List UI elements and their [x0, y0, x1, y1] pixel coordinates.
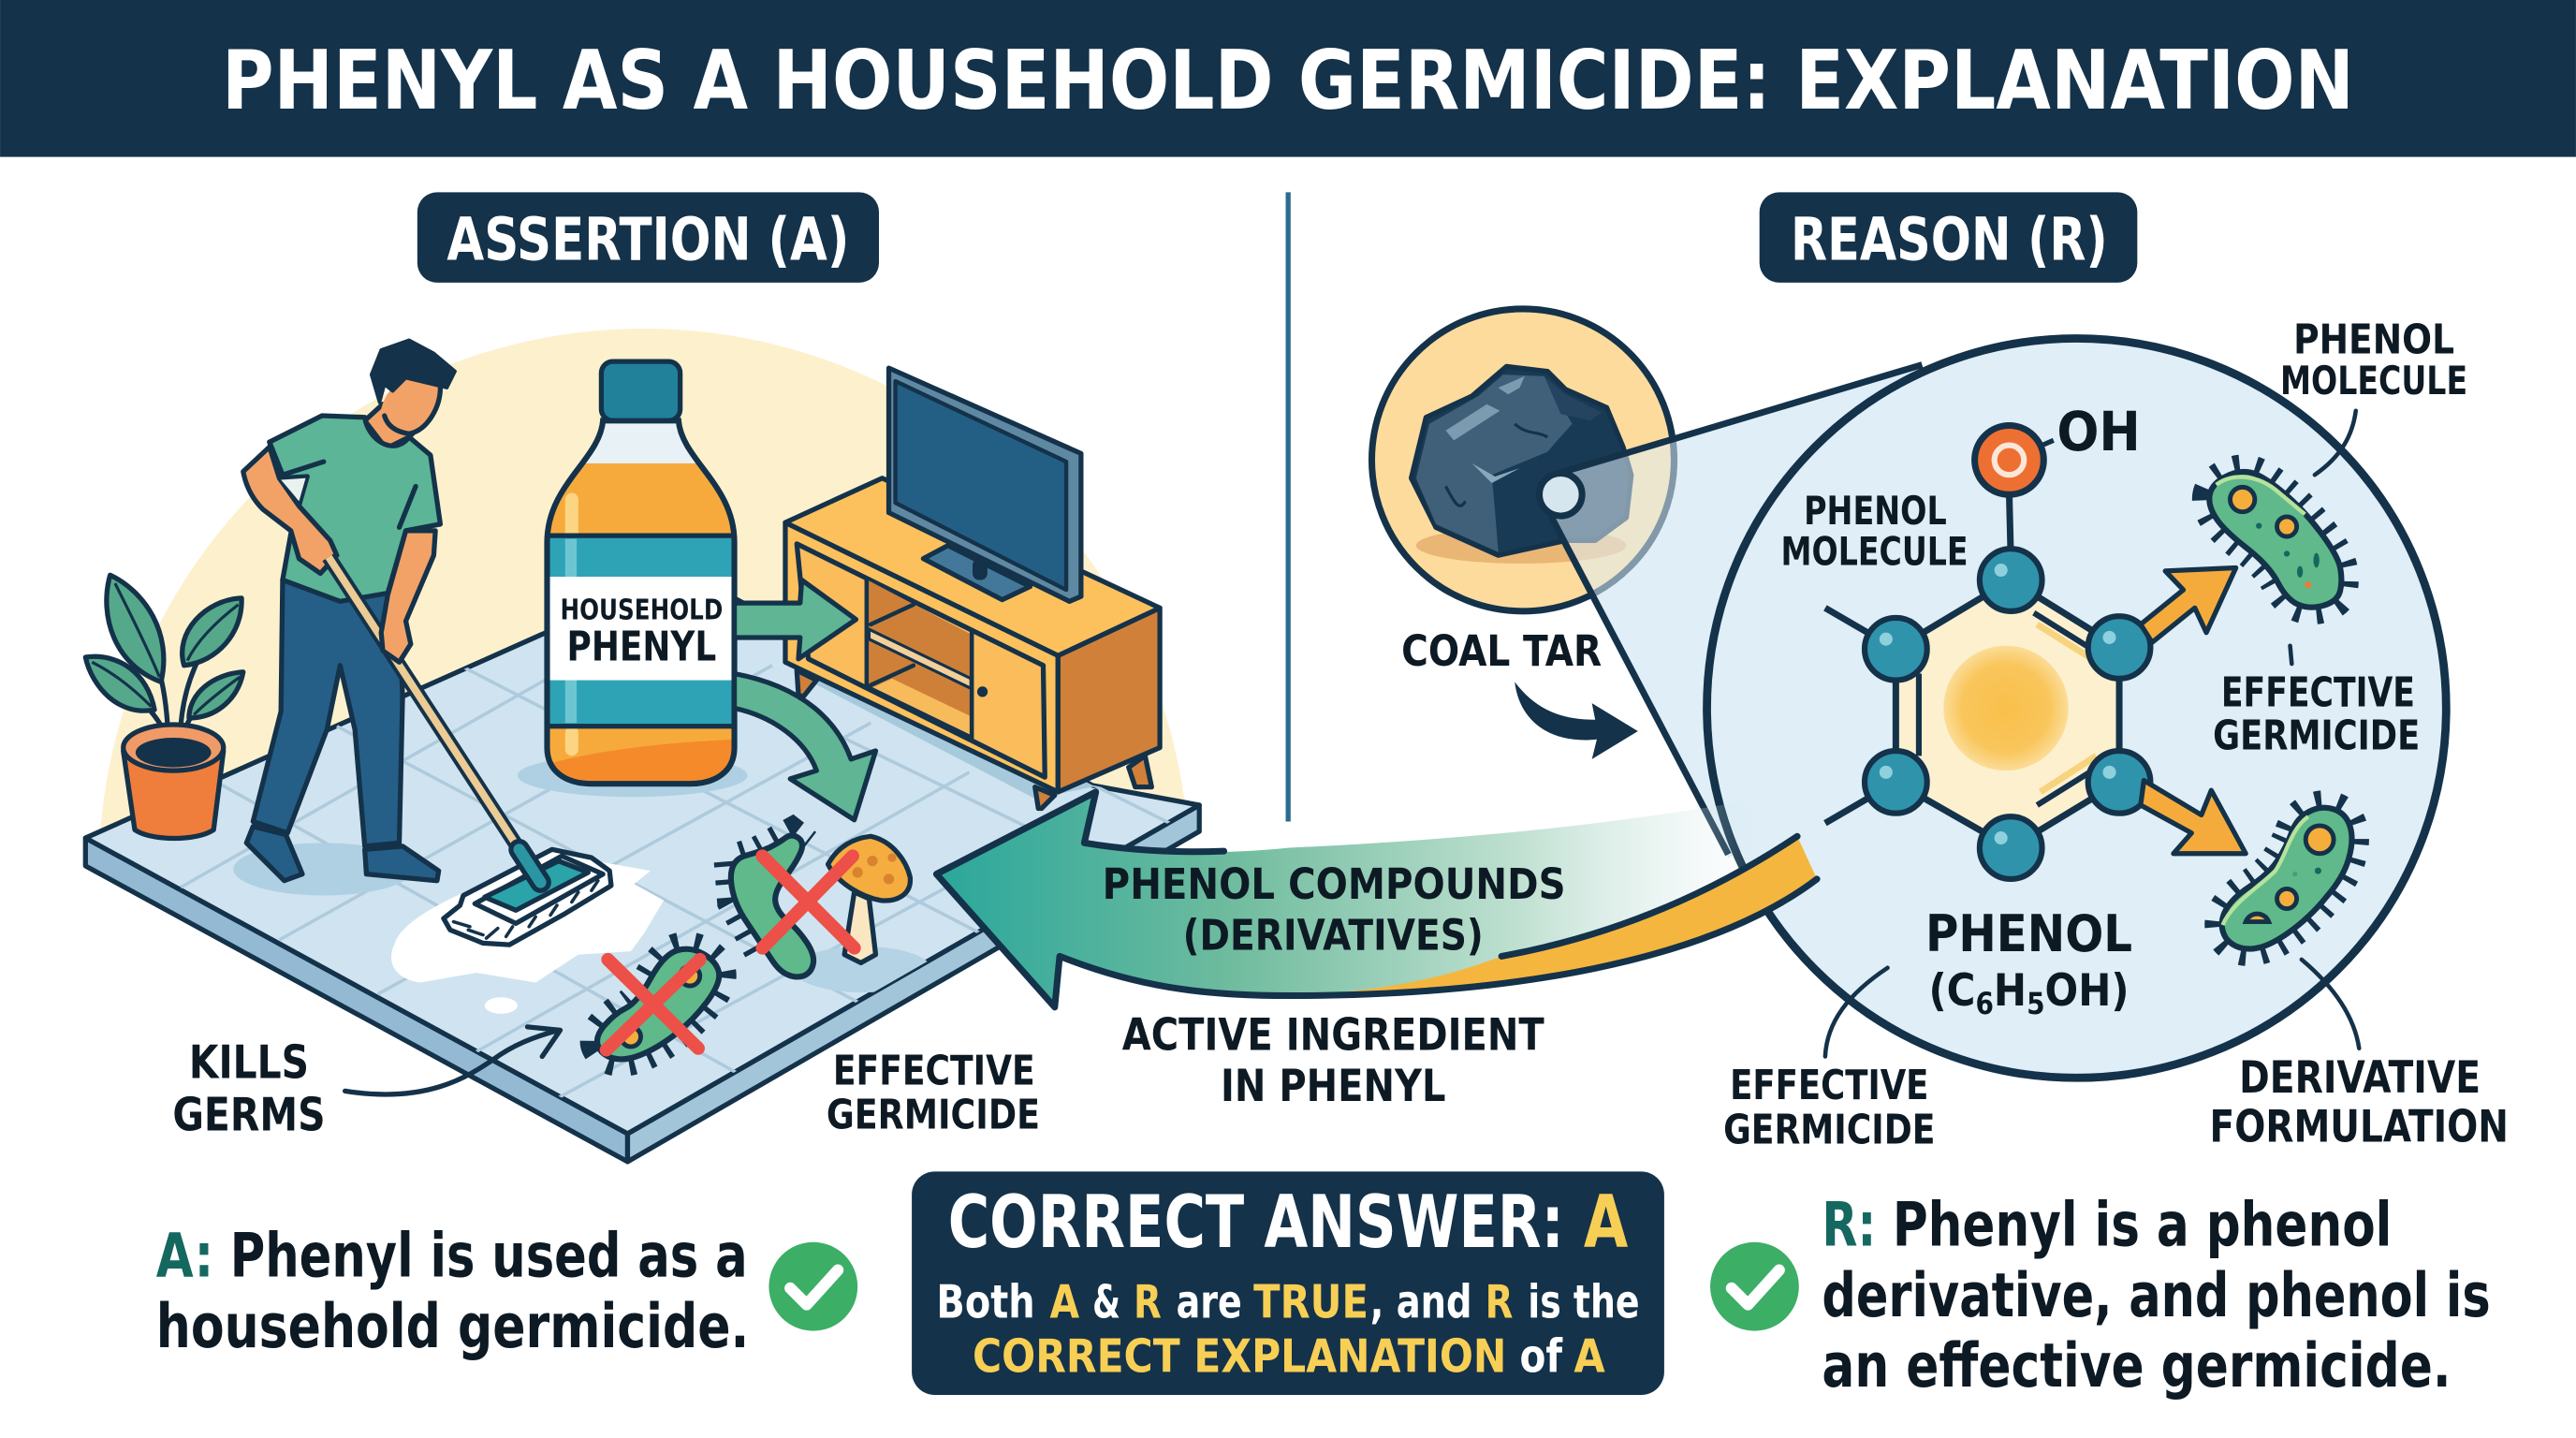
magnifier beam — [1551, 365, 2136, 858]
callout: correct answer: Both — [936, 1275, 1035, 1329]
icon: man mopping — [243, 340, 520, 881]
label: effective germicide right: GERMICIDE — [2213, 712, 2420, 759]
statement: assertion: A: — [156, 1222, 213, 1292]
icon: check reason — [1710, 1242, 1799, 1331]
label: coal tar — [1401, 626, 1638, 759]
heading: assertion — [417, 192, 879, 283]
phenol molecule diagram: OH — [2056, 400, 2141, 463]
phenol molecule diagram: MOLECULE — [1781, 529, 1969, 575]
callout: correct answer: of — [1519, 1328, 1563, 1383]
callout: correct answer: & — [1092, 1275, 1120, 1329]
germ: crossed bacterium and mushroom — [729, 833, 910, 976]
label: derivative formulation: FORMULATION — [2210, 1102, 2509, 1153]
callout: correct answer: R — [1134, 1275, 1162, 1329]
callout: correct answer: R — [1486, 1275, 1513, 1329]
callout: correct answer: are — [1177, 1275, 1242, 1329]
statement: assertion: household germicide. — [156, 1292, 749, 1362]
arrow: molecule to upper bacterium — [2141, 568, 2236, 642]
label: effective germicide — [827, 1047, 1040, 1139]
callout: correct answer: A — [1573, 1328, 1605, 1383]
statement: reason: Phenyl is a phenol — [1893, 1190, 2392, 1260]
icon: coal tar in circle — [1372, 309, 1674, 611]
icon: upper bacterium — [2209, 472, 2341, 608]
title banner — [0, 0, 2576, 157]
label: effective germicide lower: EFFECTIVE — [1730, 1062, 1928, 1109]
label: active ingredient: IN PHENYL — [1221, 1061, 1445, 1112]
label: phenol formula: (C — [1928, 965, 1982, 1017]
arrow: bottle to stand — [735, 580, 856, 659]
statement: reason: R: — [1822, 1190, 1876, 1260]
beam overlay on coal — [1556, 442, 1677, 595]
label: effective germicide: EFFECTIVE — [833, 1047, 1035, 1094]
label: phenol molecule top right — [2280, 315, 2467, 475]
magnified circle — [1707, 339, 2446, 1078]
statement: assertion — [156, 1222, 749, 1362]
icon: mop head — [444, 849, 611, 945]
callout: correct answer: is the — [1528, 1275, 1640, 1329]
panel: reason phenol magnified view — [1372, 309, 2509, 1153]
statement: assertion: Phenyl is used as a — [230, 1222, 748, 1292]
icon: bacteria and mushroom on floor — [597, 833, 910, 1059]
label: phenol formula: 6 — [1975, 988, 1994, 1021]
label: kills germs: KILLS — [189, 1034, 309, 1089]
spill — [391, 855, 664, 983]
arrow: phenol compounds to phenyl: (DERIVATIVES) — [1183, 910, 1484, 960]
callout: correct answer: CORRECT ANSWER: — [948, 1181, 1564, 1265]
arrow: molecule to lower bacterium — [2141, 781, 2246, 854]
label: coal tar: COAL TAR — [1401, 626, 1602, 676]
label: effective germicide lower — [1723, 968, 1935, 1153]
icon: household phenyl bottle: HOUSEHOLD — [561, 594, 723, 627]
label: phenol molecule top right: PHENOL — [2293, 315, 2454, 363]
icon: tv stand — [785, 478, 1160, 808]
label: phenol formula: 5 — [2027, 988, 2045, 1021]
label: effective germicide right: EFFECTIVE — [2221, 669, 2415, 717]
phenol molecule diagram — [1781, 400, 2150, 879]
callout: correct answer: CORRECT EXPLANATION — [973, 1328, 1506, 1383]
icon: household phenyl bottle: PHENYL — [567, 624, 716, 671]
label: effective germicide lower: GERMICIDE — [1723, 1106, 1935, 1153]
icon: household phenyl bottle — [542, 361, 739, 792]
arrow: phenol compounds to phenyl: PHENOL COMPOUNDS — [1103, 859, 1566, 909]
label: effective germicide: GERMICIDE — [827, 1092, 1040, 1139]
label: phenol formula: OH) — [2045, 965, 2130, 1017]
arrow: bottle to floor — [735, 674, 875, 820]
label: derivative formulation: DERIVATIVE — [2239, 1052, 2481, 1104]
arrow: phenol compounds to phenyl — [936, 792, 1817, 1007]
heading: reason: REASON (R) — [1791, 204, 2108, 273]
label: phenol formula: H — [1994, 965, 2027, 1017]
heading: assertion: ASSERTION (A) — [446, 204, 849, 273]
heading: reason — [1760, 192, 2137, 283]
callout: correct answer: A — [1050, 1275, 1079, 1329]
icon: lower bacterium — [2222, 808, 2352, 949]
germ: crossed bacterium — [597, 949, 719, 1059]
icon: check assertion — [768, 1242, 857, 1331]
label: active ingredient — [1122, 1009, 1544, 1112]
label: phenol formula — [1925, 904, 2132, 1021]
callout: correct answer — [912, 1171, 1664, 1395]
label: phenol formula: PHENOL — [1925, 904, 2132, 963]
callout: correct answer: TRUE — [1253, 1275, 1368, 1329]
statement: reason — [1822, 1190, 2491, 1401]
label: active ingredient: ACTIVE INGREDIENT — [1122, 1009, 1544, 1061]
label: derivative formulation — [2210, 960, 2509, 1153]
panel: assertion household scene — [82, 329, 1202, 1165]
label: kills germs: GERMS — [172, 1087, 326, 1141]
icon: plant — [85, 575, 243, 839]
callout: correct answer: A — [1584, 1181, 1628, 1265]
phenol molecule diagram: PHENOL — [1804, 488, 1947, 534]
label: effective germicide right — [2213, 646, 2420, 759]
callout: correct answer: , and — [1370, 1275, 1472, 1329]
label: phenol molecule top right: MOLECULE — [2280, 358, 2467, 404]
label: kills germs — [172, 1027, 561, 1141]
floor — [85, 575, 1199, 1162]
icon: television — [889, 368, 1081, 601]
